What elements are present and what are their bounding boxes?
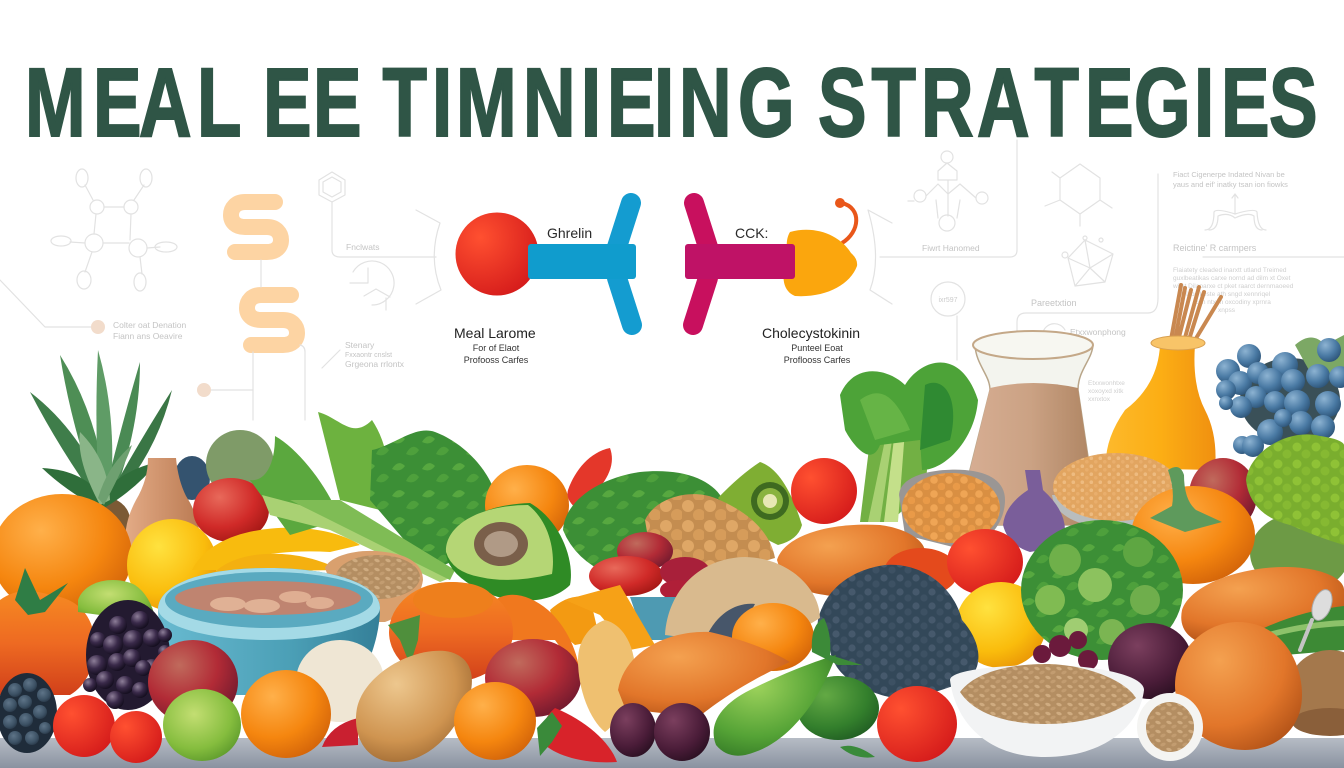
- label: cholecystokinin: Cholecystokinin: [762, 325, 860, 341]
- right line-art diagrams: [868, 140, 1344, 403]
- icon: tomato small: [884, 548, 958, 596]
- icon: pumpkin: [1131, 467, 1255, 584]
- text: etxwon: [1043, 324, 1126, 337]
- icon: kiwi: [718, 462, 802, 545]
- icon: hump curve with arrow: [1205, 194, 1266, 230]
- icon: strawberry front: [537, 708, 617, 762]
- enclosure lines: [868, 140, 1344, 360]
- icon: avocado right: [1250, 513, 1344, 593]
- icon: orange S upper: [231, 202, 281, 252]
- icon: white onion: [296, 640, 384, 722]
- icon: chickpeas: [645, 494, 775, 568]
- icon: blue bowl: [630, 597, 770, 640]
- icon: clay vase: [125, 458, 200, 556]
- icon: banana: [192, 528, 360, 570]
- icon: mango under banana: [215, 554, 340, 572]
- icon: strawberry back: [322, 718, 358, 747]
- icon: lemon: [127, 519, 217, 611]
- floor: [0, 738, 1344, 768]
- panel: ghrelin diagram: [454, 203, 636, 365]
- text: small near jar: xxnxtox: [1088, 396, 1111, 403]
- icon: tomato left: [53, 695, 115, 757]
- text: indicated note: Fiact Cigenerpe Indated Nivan be: [1173, 170, 1285, 179]
- icon: avocado half: [446, 503, 571, 601]
- text: paragraph: xnpss: [1218, 307, 1236, 314]
- text: small near jar: [1088, 380, 1125, 403]
- icon: orange back: [485, 465, 569, 545]
- icon: tomato front right: [877, 686, 957, 762]
- text: paragraph: xtvitlos keste ath sngd xennriqel: [1178, 291, 1271, 298]
- sublabel: meal: For of Elaot: [473, 343, 520, 353]
- label: ghrelin: Ghrelin: [547, 225, 592, 241]
- icon: red apple right: [1189, 458, 1257, 532]
- icon: blue broccoli: [818, 565, 978, 700]
- icon: green apple: [797, 676, 879, 740]
- icon: lentil bowl: [899, 470, 1005, 550]
- text: front hormones: Fiwrt Hanomed: [922, 243, 980, 253]
- icon: curly greens: [563, 471, 722, 575]
- text: indicated note: [1173, 170, 1288, 189]
- text: indicated note: yaus and eif' inatky tsan ion fiowks: [1173, 180, 1288, 189]
- icon: tomato small left: [110, 711, 162, 763]
- title: MEAL EE TIMNIEING STRATEGIES: [25, 49, 1318, 157]
- icon: cherries: [1033, 631, 1098, 670]
- icon: orange pepper pieces: [550, 585, 655, 650]
- icon: sweet potato centre: [618, 632, 790, 716]
- CCK molecule: [685, 198, 857, 325]
- icon: spoon head: [1308, 587, 1336, 623]
- icon: cinnamon sticks: [1170, 285, 1221, 346]
- sublabel: cck: Punteel Eoat: [791, 343, 843, 353]
- icon: sweet potato back: [777, 525, 925, 597]
- icon: plum back: [174, 456, 210, 500]
- text: collter: Fiann ans Oeavire: [113, 331, 183, 341]
- icon: white bowl of grains: [950, 664, 1144, 757]
- text: reictine: Reictine' R carmpers: [1173, 243, 1257, 253]
- icon: green melon: [206, 430, 274, 498]
- text: collter: Colter oat Denation: [113, 320, 187, 330]
- icon: mango slice: [578, 620, 635, 732]
- text: stenary: Stenary: [345, 340, 375, 350]
- icon: orange slice: [495, 595, 580, 675]
- text: stenary: Fxxaontr cnslst: [345, 352, 392, 359]
- food: front left row: [0, 568, 710, 763]
- connector with dot: collter: [0, 280, 105, 334]
- food: centre: [158, 494, 862, 732]
- sublabel: meal: [464, 343, 529, 365]
- text: paragraph: Flaiatety cleaded inarxtt utland Treimed: [1173, 267, 1287, 274]
- icon: molecule right: [908, 151, 988, 231]
- icon: cabbage: [1021, 520, 1183, 660]
- icon: small grain bowl: [325, 551, 423, 622]
- icon: spoon: [1300, 620, 1312, 650]
- sublabel: meal: Profooss Carfes: [464, 355, 529, 365]
- icon: circle label: ixr597: [938, 297, 958, 304]
- icon: kidney beans: [589, 532, 710, 600]
- text: small near jar: xoxoyxd xitk: [1088, 388, 1124, 395]
- icon: hexagon and enclosure line: [319, 172, 441, 310]
- text: collter: [113, 320, 187, 341]
- icon: green apple left: [78, 580, 156, 620]
- icon: orange tomato: [388, 582, 513, 682]
- text: stenary: Grgeona rrlontx: [345, 359, 405, 369]
- icon: potato: [356, 651, 472, 762]
- icon: orange left: [241, 670, 331, 758]
- label: meal larome: Meal Larome: [454, 325, 536, 341]
- icon: tall lettuce: [840, 362, 978, 522]
- icon: pineapple: [30, 350, 172, 544]
- icon: molecule left: [51, 169, 177, 291]
- icon: orange S lower: [247, 295, 297, 345]
- icon: grain bowl back: [1052, 453, 1180, 528]
- icon: glass jar with drink: [970, 331, 1093, 525]
- food: right back: [714, 285, 1344, 762]
- left line-art diagrams: [0, 169, 441, 420]
- text: enclwats: Fnclwats: [346, 242, 380, 252]
- icon: pumpkin pepper left: [0, 568, 95, 695]
- icon: basil leaf: [812, 618, 862, 665]
- icon: tomato back: [791, 458, 857, 524]
- icon: green pepper: [714, 655, 836, 756]
- label: CCK: CCK:: [735, 225, 768, 241]
- icon: eggplant: [1003, 470, 1065, 552]
- icon: orange front: [454, 682, 536, 760]
- text: paragraph: guxlbeatikas carxe nornd ad dilm xt Oxet: [1173, 275, 1291, 282]
- icon: hexagon right: [1045, 164, 1112, 226]
- sublabel: cck: Proflooss Carfes: [784, 355, 851, 365]
- icon: leafy greens: [250, 412, 499, 582]
- icon: red apple back: [193, 478, 269, 542]
- sublabel: cck: [784, 343, 851, 365]
- icon: blueberries: [1216, 335, 1344, 457]
- text: small near jar: Etxxwonhtxe: [1088, 380, 1125, 387]
- icon: big orange: [0, 494, 132, 616]
- icon: lime: [163, 689, 241, 761]
- icon: circle label: [931, 282, 965, 316]
- text: pareetxtion: Pareetxtion: [1031, 298, 1077, 308]
- food: back row: [0, 350, 978, 616]
- connector dot: [197, 383, 253, 397]
- icon: big orange onion: [1175, 622, 1302, 750]
- icon: yellow vase: [1106, 336, 1216, 470]
- ghrelin molecule: [456, 203, 636, 325]
- icon: bread arc: [665, 557, 820, 640]
- icon: long sweet potato: [1181, 567, 1344, 640]
- icon: cucumber: [1240, 606, 1344, 655]
- text: paragraph: [1172, 267, 1294, 314]
- connectors between S shapes: [253, 260, 340, 420]
- icon: dark grapes: [83, 600, 172, 710]
- panel: CCK diagram: [685, 198, 860, 365]
- icon: red pepper: [567, 448, 612, 510]
- icon: small leaf: [840, 746, 875, 758]
- icon: tomato large: [947, 529, 1023, 595]
- icon: small white cup: [1137, 693, 1203, 761]
- text: stenary: [345, 340, 405, 369]
- icon: polyhedron: [1062, 236, 1113, 286]
- icon: wooden loaf: [1288, 650, 1344, 736]
- icon: red onion: [1108, 623, 1192, 699]
- text: paragraph: wifet Dilaparxe ct pket raarct dernmaoeed: [1172, 283, 1294, 290]
- icon: red plum: [148, 640, 238, 724]
- icon: yellow orange fruit: [956, 582, 1046, 668]
- icon: blackberry: [0, 673, 57, 753]
- text: etxwon: Etxxwonphong: [1070, 327, 1126, 337]
- text: paragraph: con ntxon oxcodiny xprnra: [1195, 299, 1271, 306]
- icon: plums front: [610, 703, 710, 761]
- icon: soup bowl: [158, 568, 380, 695]
- icon: orange centre: [732, 603, 814, 671]
- icon: plum tomato centre: [485, 639, 581, 717]
- icon: green lettuce right: [1246, 434, 1344, 545]
